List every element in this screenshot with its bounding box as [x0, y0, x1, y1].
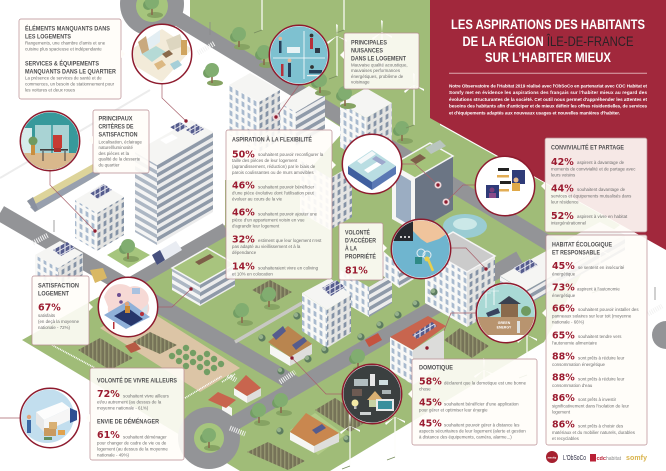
heading: neighbourhood services: SERVICES & ÉQUIPEMENTS: [25, 58, 100, 68]
heading: move house: ENVIE DE DÉMÉNAGER: [97, 416, 159, 426]
stat 42%: 42%: [551, 157, 574, 168]
heading: missing in homes: LES LOGEMENTS: [25, 34, 72, 40]
stat 32%: estiment que leur logement n'est: [258, 238, 321, 243]
text: satisfied: nationale - 72%): [38, 325, 71, 330]
stat 46% evolving room: évoluer au cours de la vie: [232, 196, 283, 202]
green roof tower with glass facade: [392, 140, 453, 232]
stat 42%: leurs voisins: [551, 173, 576, 178]
text: satisfied: satisfaits: [38, 313, 55, 318]
heading: ownership: VOLONTÉ: [345, 228, 371, 236]
circle: noise nuisances: [269, 25, 329, 85]
circle: modular floor plan: [342, 134, 402, 194]
stat 14%: souhaiteraient vivre en coliving: [258, 266, 318, 270]
circle: apartment interior: [132, 24, 192, 84]
panel: housing satisfaction: [32, 276, 93, 345]
red roof building: [390, 316, 446, 385]
stat 50%: 50%: [232, 150, 255, 160]
stat 45% remote: souhaitent pouvoir gérer à distance les: [444, 422, 519, 428]
circle: moving truck: [20, 388, 80, 448]
heading: ownership: D'ACCÉDER: [345, 236, 376, 244]
heading: neighbourhood services: MANQUANTS DANS LE QUARTIER: [25, 68, 116, 76]
introduction paragraph: [449, 84, 647, 115]
red header background: [430, 0, 666, 250]
circle: home office: [20, 111, 80, 171]
stat 14%: [232, 262, 319, 276]
stat 46% evolving room: 46%: [232, 180, 255, 192]
stat 65%: l'autonomie alimentaire: [552, 340, 598, 345]
stat 66%: souhaitent pouvoir installer des: [578, 307, 639, 312]
stat 72%: 72%: [97, 389, 120, 400]
stat 45% remote: à distance des équipements, caméra, alarme...): [419, 434, 512, 440]
stat 32%: dépendance: [232, 250, 257, 255]
stat 88% water: consommation d'eau: [552, 383, 593, 388]
logo: red roundel: nexity: [548, 456, 557, 460]
stat 88% energy: [552, 352, 625, 367]
stat 61%: 61%: [97, 430, 120, 441]
heading: nuisances: PRINCIPALES: [351, 40, 388, 46]
stat 45% insecurity: 45%: [552, 261, 575, 272]
stat 14%: et 10% en colocation: [232, 272, 273, 276]
stat 73%: aspirent à l'autonomie: [577, 286, 620, 292]
stat 72%: moyenne nationale - 61%): [97, 406, 149, 410]
stat 61%: [97, 430, 168, 458]
stat 86% insulation: 86%: [552, 393, 575, 404]
stat 50%: (agrandissement, réduction) par le biais de: [232, 164, 316, 169]
stat 14%: 14%: [232, 262, 255, 272]
stat 45% remote: [419, 418, 526, 440]
stat 45% application: pour gérer et optimiser leur énergie: [419, 408, 488, 412]
houses: [208, 326, 339, 453]
heading: satisfaction criteria: CRITÈRES DE: [98, 122, 134, 130]
stat 65%: 65%: [552, 330, 575, 342]
introduction paragraph: évolutions structurantes de la société. Cet outil nous permet d'appréhender les attentes et: [449, 97, 647, 102]
stat 44%: services et équipements mutualisés dans: [551, 193, 632, 198]
heading: housing satisfaction: LOGEMENT: [38, 290, 69, 298]
long low building with solar panels: [500, 222, 625, 306]
stat 72%: et/ou autrement (au dessus de la: [97, 400, 162, 404]
stat 52%: 52%: [551, 211, 574, 222]
stat 52%: intergénérationnel: [551, 220, 586, 225]
roads: [0, 15, 560, 436]
stat 44%: souhaitent davantage de: [577, 187, 625, 192]
circle: green energy house: ENERGY: [497, 326, 512, 330]
stat 58%: 58%: [419, 376, 442, 388]
tram: [27, 164, 100, 212]
stat 46% neighbouring room: souhaitent pouvoir ajouter une: [258, 212, 317, 216]
stat 72%: souhaitent vivre ailleurs: [123, 394, 169, 398]
title: SUR L’HABITER MIEUX: [485, 49, 612, 65]
stat 86% materials: et recyclables: [552, 436, 580, 441]
small solar building: [35, 241, 83, 290]
logo: Somfy: somfy: [626, 455, 647, 462]
stat 72%: [97, 389, 170, 410]
stat 61%: souhaitent déménager: [123, 434, 167, 440]
stat 86% materials: 86%: [552, 420, 575, 430]
stat 32%: [232, 234, 322, 255]
lower white building: [302, 247, 429, 348]
stat 86% materials: matériaux et du mobilier naturels, durables: [552, 430, 636, 435]
heading: conviviality: CONVIVIALITÉ ET PARTAGE: [551, 142, 625, 152]
stat 44%: leur résidence: [551, 200, 579, 205]
heading: home automation: DOMOTIQUE: [419, 364, 454, 372]
stat 88% energy: consommation énergétique: [552, 362, 606, 367]
stat 58%: déclarent que la domotique est une bonne: [444, 380, 526, 386]
stat 81%: 81%: [345, 266, 368, 276]
stat 86% insulation: sont prêts à investir: [578, 397, 616, 402]
street lamps: [54, 22, 655, 300]
tan path and lighter plots: [100, 243, 345, 455]
stat 46% evolving room: souhaitent pouvoir bénéficier: [258, 184, 314, 190]
stat 46% neighbouring room: pièce d'un appartement voisin en vue: [232, 218, 305, 222]
stat 86% materials: sont prêts à choisir des: [578, 424, 623, 428]
text: nuisances: mauvaises performances: [351, 68, 401, 73]
trees: [119, 0, 438, 451]
stat 45% remote: 45%: [419, 418, 442, 430]
logos: [546, 451, 647, 463]
wind turbines: [252, 0, 610, 469]
stat 50%: parois coulissantes ou de murs amovibles: [232, 170, 314, 175]
heading: satisfaction criteria: PRINCIPAUX: [98, 116, 133, 122]
central white buildings: [229, 73, 392, 230]
stat 45% insecurity: énergétique: [552, 271, 576, 276]
stat 32%: 32%: [232, 234, 255, 246]
stat 50%: souhaitent pouvoir reconfigurer la: [258, 152, 323, 157]
green roof building: [172, 248, 235, 306]
stat 45% application: 45%: [419, 398, 442, 408]
stat 46% neighbouring room: d'agrandir leur logement: [232, 224, 280, 228]
stat 52%: [551, 211, 628, 225]
text: satisfaction criteria: du quartier: [98, 162, 120, 167]
stat 66%: 66%: [552, 304, 575, 314]
logo: CDC Habitat: [590, 454, 622, 462]
logo: CDC Habitat: cdc: [596, 456, 606, 462]
title: [451, 16, 645, 65]
stat 32%: pas adapté au vieillissement et à la: [232, 244, 301, 249]
stat 58%: chose: [419, 386, 431, 392]
panel: missing elements and services: [19, 19, 125, 99]
vehicles: [90, 241, 382, 353]
heading: nuisances: NUISANCES: [351, 48, 384, 54]
text: nuisances: Mauvaise qualité acoustique,: [351, 62, 408, 68]
stat 42%: moments de convivialité et de partage avec: [551, 166, 636, 171]
grid facade building: [425, 232, 495, 327]
text: nuisances: voisinage: [351, 80, 370, 85]
stat 42%: [551, 157, 636, 178]
panel: home ownership: [339, 223, 387, 280]
stat 46% evolving room: d'une pièce évolutive dont l'utilisation peut: [232, 190, 315, 196]
stat 86% insulation: [552, 393, 630, 415]
stat 50%: taille des pièces de leur logement: [232, 158, 298, 163]
stat 66%: [552, 304, 639, 325]
pond: [443, 214, 487, 238]
text: missing in homes: Rangements, une chambre d'amis et une: [25, 40, 105, 46]
title rule: [449, 72, 647, 75]
stat 52%: aspirent à vivre en habitat: [577, 214, 627, 219]
heading: ownership: PROPRIÉTÉ: [345, 252, 377, 260]
heading: ecological housing: HABITAT ÉCOLOGIQUE: [552, 240, 613, 248]
circle: green energy house: GREEN: [498, 321, 511, 325]
stat 61%: nationale - 49%): [97, 452, 130, 458]
stat 65%: souhaitent tendre vers: [578, 334, 621, 339]
heading: ownership: À LA: [345, 244, 357, 252]
stat 86% insulation: significativement dans l'isolation de leur: [552, 403, 630, 408]
introduction paragraph: Notre Observatoire de l'Habitat 2019 réalisé avec l'ObSoCo en partenariat avec CDC Habitat et: [449, 84, 647, 88]
heading: missing in homes: ÉLÉMENTS MANQUANTS DANS: [25, 24, 111, 32]
stat 73%: énergétique: [552, 293, 576, 298]
heading: nuisances: DANS LE LOGEMENT: [351, 56, 406, 62]
stat 67%: 67%: [38, 302, 61, 314]
stat 45% remote: aspects sécuritaires de leur logement (alerte et gestion: [419, 428, 526, 434]
crosswalks: [33, 43, 662, 434]
stat 46% neighbouring room: 46%: [232, 208, 255, 218]
introduction paragraph: et d'équipements adaptés aux nouveaux usages et nouvelles manières d'habiter.: [449, 110, 620, 115]
text: missing in homes: cuisine plus spacieuse et indépendante: [25, 46, 102, 52]
stat 65%: [552, 330, 622, 345]
logo: ObSoCo: L'ObSoCo: [563, 453, 586, 462]
stat 44%: 44%: [551, 184, 574, 194]
circle: hand holding keys: [391, 219, 451, 279]
connectors: [0, 84, 488, 418]
stat 66%: panneaux solaires sur leur toit (moyenne: [552, 313, 632, 318]
stat 88% water: sont prêts à réduire leur: [578, 376, 624, 382]
stat 45% application: souhaitent bénéficier d'une application: [444, 402, 519, 406]
stat 86% insulation: logement: [552, 410, 571, 415]
stat 73%: 73%: [552, 282, 575, 294]
panel: satisfaction criteria: [89, 110, 149, 173]
stat 73%: [552, 282, 620, 298]
stat 45% insecurity: [552, 261, 625, 276]
circle: video chat between neighbours: [475, 156, 535, 216]
text: nuisances: énergétiques, problème de: [351, 74, 404, 79]
panel: ecological and responsible housing: [542, 235, 647, 445]
panel: main nuisances: [340, 33, 419, 89]
stat 46% neighbouring room: [232, 208, 318, 228]
stat 45% insecurity: se sentent en insécurité: [578, 265, 624, 270]
cultivated fields: [78, 280, 489, 470]
title: DE LA RÉGION ÎLE-DE-FRANCE: [462, 33, 634, 49]
stat 58%: [419, 376, 527, 392]
text: neighbourhood services: les voitures et deux roues: [25, 88, 76, 92]
text: satisfaction criteria: des pièces et la: [98, 151, 130, 156]
text: neighbourhood services: La présence de services de santé et de: [25, 76, 102, 80]
text: satisfaction criteria: naturel/luminosité: [98, 145, 133, 150]
stat 88% water: [552, 372, 625, 388]
circle: connected home devices: [342, 364, 402, 424]
white picket fences: [52, 345, 235, 398]
stat 44%: [551, 184, 632, 205]
stat 66%: nationale - 66%): [552, 320, 585, 325]
heading: satisfaction criteria: SATISFACTION: [98, 132, 138, 138]
stat 88% energy: 88%: [552, 352, 575, 362]
text: satisfied: (en deçà la moyenne: [38, 319, 80, 324]
heading: flexibility: ASPIRATION À LA FLEXIBILITÉ: [232, 134, 313, 144]
panel: aspiration to flexibility: [226, 130, 336, 279]
text: satisfaction criteria: qualité de la desserte: [98, 157, 141, 162]
panel: desire to live elsewhere and to move: [86, 368, 184, 460]
circle: housing satisfaction illustration: [98, 277, 158, 337]
logo: CDC Habitat: habitat: [606, 456, 622, 462]
text: neighbourhood services: commerces, un besoin de stationnement pour: [25, 82, 115, 86]
panel: conviviality and sharing: [541, 138, 647, 232]
text: satisfaction criteria: Localisation, éclairage: [98, 140, 142, 144]
stat 61%: pour changer de cadre de vie ou de: [97, 440, 167, 446]
heading: housing satisfaction: SATISFACTION: [38, 282, 79, 290]
heading: ecological housing: ET RESPONSABLE: [552, 250, 601, 256]
stat 86% materials: [552, 420, 636, 441]
panel: home automation: [408, 359, 537, 445]
stat 61%: logement (au dessus de la moyenne: [97, 446, 168, 452]
building with solar roof: [75, 184, 124, 251]
introduction paragraph: besoins des habitants afin d'anticiper et de mieux définir les offres résidentielles, de services: [449, 104, 647, 109]
stat 46% evolving room: [232, 180, 315, 202]
heading: live elsewhere: VOLONTÉ DE VIVRE AILLEURS: [97, 376, 178, 384]
stat 50%: [232, 150, 324, 175]
introduction paragraph: Somfy met en évidence les aspirations des français sur l'habiter mieux au regard des: [449, 90, 647, 95]
stat 45% application: [419, 398, 519, 412]
stat 42%: aspirent à davantage de: [577, 160, 624, 165]
circle: green energy house: [476, 283, 536, 345]
tower building: [135, 120, 213, 245]
stat 88% water: 88%: [552, 372, 575, 384]
stat 88% energy: sont prêts à réduire leur: [578, 356, 624, 360]
orchard: [169, 345, 224, 375]
